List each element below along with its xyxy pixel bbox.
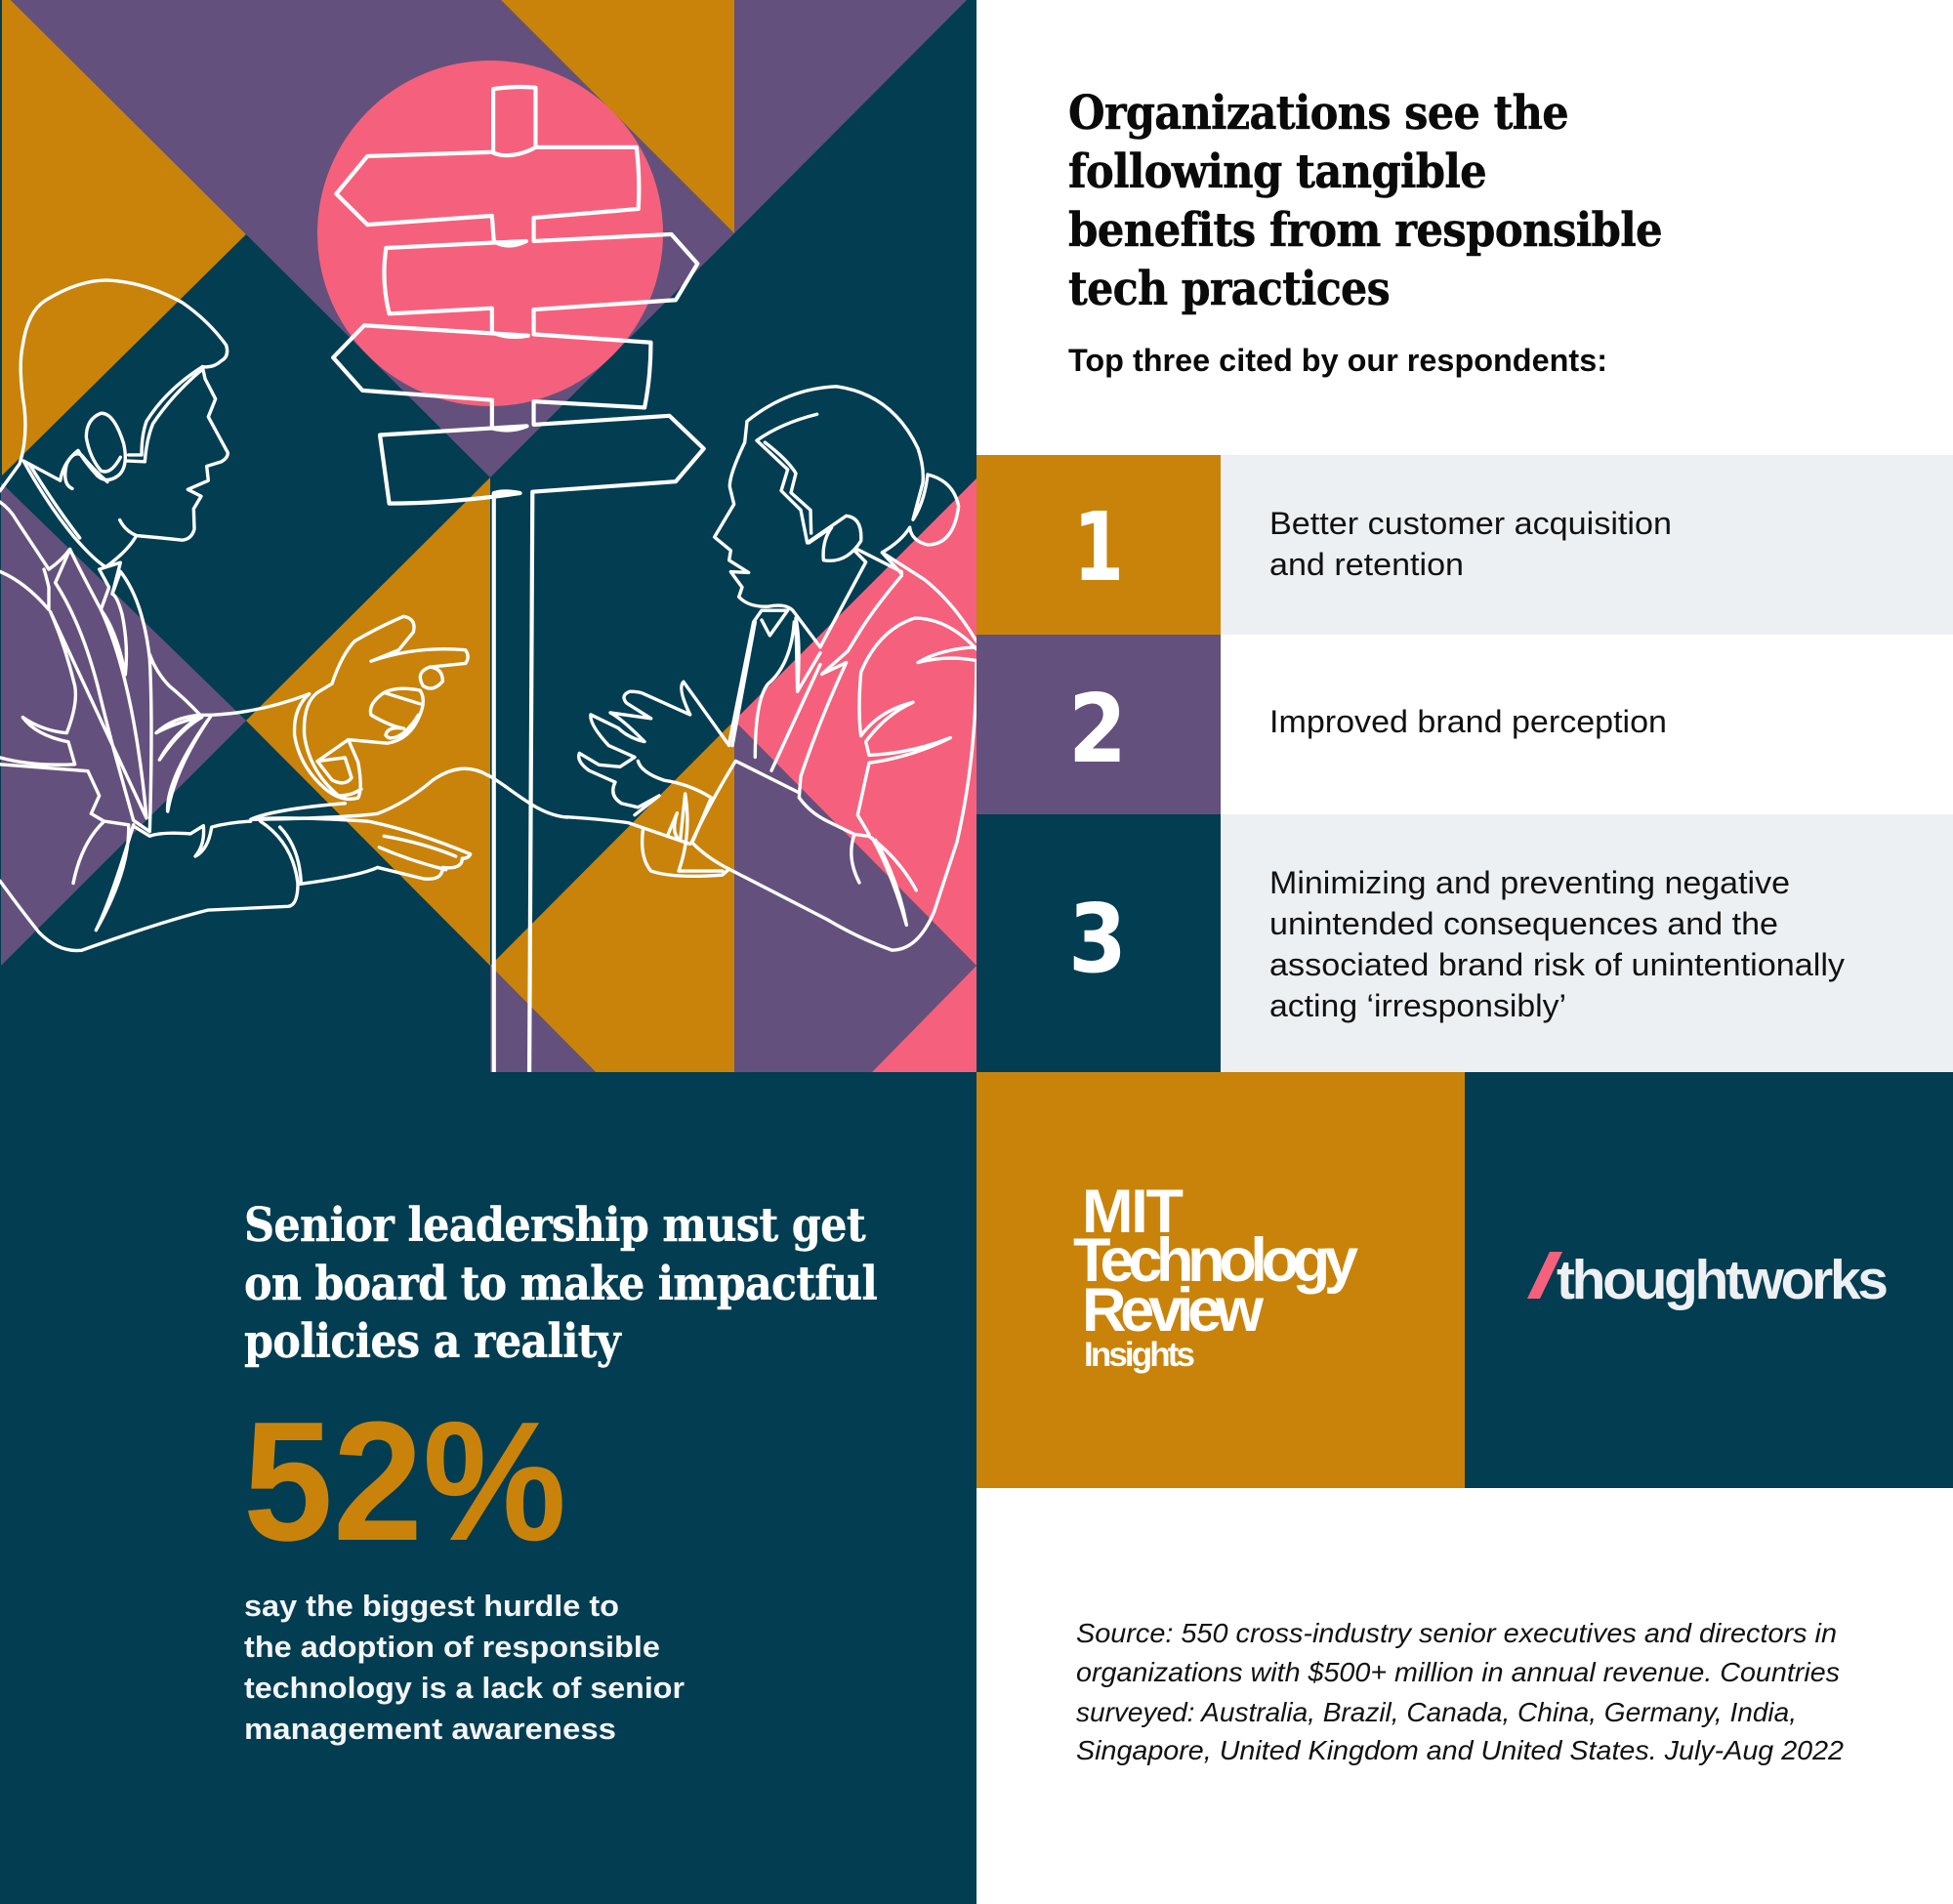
illustration: woman's hands [579, 682, 729, 876]
source note [1076, 1618, 1844, 1765]
row 3: associated brand risk of unintentionally [1269, 947, 1845, 982]
source note: Source: 550 cross-industry senior executives and directors in [1076, 1618, 1837, 1648]
row 3: 3 [1068, 884, 1127, 994]
logo panel: MIT Technology Review Insights: Review [1082, 1276, 1265, 1345]
row 3 [976, 814, 1953, 1072]
icon: signpost [333, 87, 704, 1072]
pink circle [317, 61, 663, 406]
subheading: Top three cited by our respondents: [1068, 343, 1607, 378]
heading: tangible benefits: Organizations see the [1068, 86, 1568, 141]
logo panel: MIT Technology Review Insights [976, 1072, 1465, 1488]
logo panel: MIT Technology Review Insights: Insights [1084, 1336, 1195, 1374]
logo panel: MIT Technology Review Insights: MIT [1082, 1178, 1184, 1246]
source note: Singapore, United Kingdom and United States. July-Aug 2022 [1076, 1735, 1844, 1765]
source note: surveyed: Australia, Brazil, Canada, China, Germany, India, [1076, 1697, 1797, 1727]
heading: tangible benefits: benefits from responsible [1068, 203, 1662, 258]
description text: the adoption of responsible [244, 1630, 660, 1664]
line art [0, 87, 976, 1072]
row 1: Better customer acquisition [1269, 506, 1672, 541]
row 3: unintended consequences and the [1269, 906, 1778, 941]
description text: technology is a lack of senior [244, 1671, 685, 1705]
row 3: acting ‘irresponsibly’ [1269, 988, 1566, 1023]
row 1 [976, 455, 1953, 635]
row 2 [976, 635, 1953, 814]
panel: tangible benefits header [1068, 86, 1662, 378]
panel: senior leadership callout [0, 1072, 976, 1904]
illustration: man on the left [0, 280, 310, 951]
row 2: 2 [1068, 674, 1127, 784]
big number: 52%: 52% [243, 1386, 566, 1576]
wordmark: thoughtworks [1557, 1249, 1889, 1311]
panel: ranked benefits list [976, 455, 1953, 1072]
heading: senior leadership [244, 1198, 878, 1369]
row 2: Improved brand perception [1269, 704, 1667, 739]
logo panel: MIT Technology Review Insights: Technology [1073, 1226, 1358, 1295]
description text: say the biggest hurdle to [244, 1589, 619, 1623]
illustration: man's hands [251, 616, 488, 884]
source note: organizations with $500+ million in annual revenue. Countries [1076, 1657, 1840, 1687]
row 1: and retention [1269, 547, 1464, 582]
heading: senior leadership: on board to make impactful [244, 1257, 878, 1311]
illustration: woman on the right [566, 387, 976, 950]
panel: illustration [0, 0, 976, 1072]
heading: tangible benefits: tech practices [1068, 262, 1390, 316]
logo panel: thoughtworks [1465, 1072, 1953, 1488]
icon: logo slash [1527, 1252, 1562, 1299]
heading: tangible benefits [1068, 86, 1662, 316]
row 1: 1 [1073, 492, 1124, 602]
description text [244, 1589, 685, 1746]
illustration: connecting line between the two figures [488, 775, 567, 817]
description text: management awareness [244, 1712, 616, 1746]
heading: tangible benefits: following tangible [1068, 145, 1486, 199]
heading: senior leadership: policies a reality [244, 1314, 623, 1369]
heading: senior leadership: Senior leadership must get [244, 1198, 866, 1253]
row 3: Minimizing and preventing negative [1269, 865, 1790, 900]
